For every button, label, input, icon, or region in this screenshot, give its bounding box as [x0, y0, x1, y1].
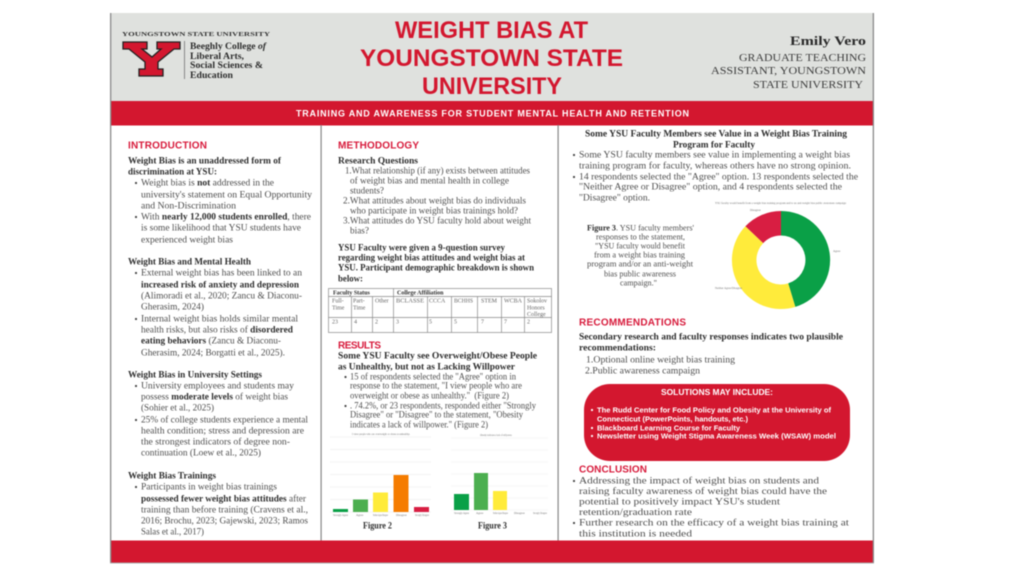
table: participant demographics: Full- — [332, 298, 344, 304]
text block: weight bias and mental health: Gherasim, 2024; Borgatti et al., 2025). — [141, 348, 285, 358]
callout: solutions may include: Newsletter using Weight Stigma Awareness Week (WSAW) model — [597, 434, 836, 440]
subtitle banner: TRAINING AND AWARENESS FOR STUDENT MENTAL HEALTH AND RETENTION — [296, 108, 689, 118]
title — [360, 17, 623, 100]
text block: weight bias in university settings: University employees and students may — [141, 380, 294, 392]
table: participant demographics: Honors — [527, 306, 545, 312]
logo: Youngstown State University — [122, 32, 271, 81]
bar chart: figure 2: Agree — [356, 513, 364, 517]
text block: research questions: 2.What attitudes about weight bias do individuals — [343, 196, 526, 206]
bar chart: figure 2 — [330, 432, 431, 530]
text block: weight bias trainings: possessed fewer weight bias attitudes after — [141, 494, 307, 504]
author block: ASSISTANT, YOUNGSTOWN — [711, 66, 866, 77]
table: participant demographics: BCLASSE — [396, 298, 424, 304]
heading: faculty value — [585, 128, 847, 150]
table: participant demographics: 5 — [429, 320, 432, 326]
logo: Youngstown State University: Social Sciences & — [190, 61, 263, 71]
header band — [110, 13, 874, 101]
text block: research questions: students? — [350, 186, 384, 196]
callout: solutions may include: The Rudd Center for Food Policy and Obesity at the University of — [597, 408, 832, 414]
table: participant demographics: 5 — [454, 320, 457, 326]
text block: conclusion: Addressing the impact of weight bias on students and — [579, 476, 819, 486]
text block: research questions: bias? — [350, 226, 369, 236]
donut chart: figure 3 responses — [715, 201, 846, 309]
text block: survey description — [338, 242, 535, 284]
heading: methodology: METHODOLOGY — [338, 140, 419, 152]
bar chart: figure 3: Disagree — [514, 511, 525, 515]
text block: weight bias trainings — [128, 470, 308, 538]
table: participant demographics: 3 — [396, 320, 399, 326]
bar chart: figure 2: Disagree — [396, 513, 407, 517]
text block: results: indicates a lack of willpower." (Figure 2) — [350, 420, 488, 430]
text block: faculty value bullets: training program for faculty, whereas others have no strong opinion. — [579, 160, 851, 172]
text block: weight bias trainings: Weight Bias Trainings — [128, 470, 216, 482]
text block: recommendations: 1.Optional online weight bias training — [586, 354, 735, 366]
text block: weight bias in university settings — [128, 370, 308, 458]
table: participant demographics: 7 — [504, 320, 507, 326]
author block: STATE UNIVERSITY — [753, 80, 863, 91]
text block: conclusion: Further research on the efficacy of a weight bias training at — [579, 518, 849, 528]
panel: methodology and results column — [328, 140, 552, 530]
text block: weight bias in university settings: (Sohier et al., 2025) — [141, 402, 214, 414]
table: participant demographics: Faculty Status — [333, 290, 370, 296]
table: participant demographics: College Affiliation — [397, 290, 444, 296]
logo: Youngstown State University: YOUNGSTOWN STATE UNIVERSITY — [122, 32, 271, 38]
heading: introduction: INTRODUCTION — [128, 140, 207, 152]
text block: research questions: of weight bias and mental health in college — [350, 176, 509, 186]
text block: weight bias at YSU: and Non-Discrimination — [141, 200, 236, 212]
text block: weight bias at YSU: experienced weight bias — [141, 234, 233, 246]
text block: weight bias and mental health: Weight Bias and Mental Health — [128, 256, 252, 268]
table: participant demographics: CCCA — [429, 298, 446, 304]
table: participant demographics: BCHHS — [454, 298, 473, 304]
text block: weight bias and mental health: Gherasim, 2024) — [141, 302, 204, 312]
table: participant demographics: 4 — [354, 320, 357, 326]
callout: solutions may include: Blackboard Learning Course for Faculty — [597, 426, 740, 432]
heading: results: RESULTS — [338, 340, 381, 352]
panel: faculty value and recommendations column — [573, 128, 858, 540]
title: UNIVERSITY — [422, 73, 562, 100]
caption: figure 3: Figure 3 — [478, 520, 507, 530]
text block: weight bias in university settings: possess moderate levels of weight bias — [141, 392, 288, 402]
panel: introduction column — [128, 140, 312, 538]
text block: faculty value bullets — [573, 150, 858, 204]
table: participant demographics: 23 — [332, 320, 338, 326]
bar chart: figure 3: Neither Agree/Disagree — [493, 511, 508, 515]
text block: weight bias in university settings: the strongest indicators of degree non- — [141, 436, 290, 448]
heading: conclusion: CONCLUSION — [579, 464, 647, 476]
text block: weight bias at YSU — [128, 156, 312, 246]
bar chart: figure 3: Obesity indicates a lack of willpower. — [480, 433, 512, 437]
table: participant demographics: 7 — [481, 320, 484, 326]
text block: conclusion — [573, 476, 849, 540]
text block: weight bias and mental health — [128, 256, 302, 358]
text block: figure 3 caption: from a weight bias training — [594, 250, 686, 260]
bar chart: figure 2: I view people who are overweight or obese as unhealthy. — [352, 432, 410, 436]
bar chart: figure 2: Neither Agree/Disagree — [373, 513, 388, 517]
table: participant demographics — [328, 288, 552, 332]
text block: figure 3 caption: bias public awareness — [604, 268, 677, 278]
bar chart: figure 3: Strongly Agree — [454, 511, 470, 515]
text block: weight bias trainings: Participants in weight bias trainings — [141, 482, 277, 492]
text block: weight bias and mental health: increased risk of anxiety and depression — [141, 280, 300, 290]
donut chart: figure 3 responses: Agree — [833, 249, 841, 253]
bar chart: figure 3: Strongly Disagree — [533, 511, 547, 515]
text block: weight bias at YSU: discrimination at YSU: — [128, 166, 217, 178]
author block: GRADUATE TEACHING — [739, 53, 866, 64]
text block: weight bias and mental health: External weight bias has been linked to an — [141, 268, 302, 278]
text block: figure 3 caption: responses to the statement, — [596, 232, 685, 242]
table: participant demographics: Time — [353, 306, 366, 312]
heading: faculty value: Some YSU Faculty Members see Value in a Weight Bias Training — [585, 128, 847, 140]
text block: weight bias in university settings: health condition; stress and depression are — [141, 426, 304, 436]
text block: research questions: who participate in weight bias trainings hold? — [350, 206, 518, 216]
table: participant demographics: College — [527, 312, 546, 318]
text block: weight bias and mental health: (Alimoradi et al., 2020; Zancu & Diaconu- — [141, 290, 302, 302]
author block: Emily Vero — [790, 34, 866, 48]
text block: weight bias and mental health: health risks, but also risks of disordered — [141, 324, 294, 336]
heading: faculty value: Program for Faculty — [673, 140, 755, 150]
text block: weight bias and mental health: eating behaviors (Zancu & Diaconu- — [141, 336, 281, 346]
donut chart: figure 3 responses: YSU faculty would benefit from a weight bias training program and/or an anti-weight bias public awareness campaign — [715, 201, 846, 205]
bar chart: figure 2: Strongly Agree — [333, 513, 349, 517]
text block: results: as Unhealthy, but not as Lacking Willpower — [338, 362, 516, 372]
text block: results: response to the statement, "I view people who are — [350, 380, 522, 392]
table: participant demographics: Sokolov — [527, 298, 547, 304]
text block: figure 3 caption: program and/or an anti-weight — [587, 258, 694, 268]
text block: conclusion: potential to positively impact YSU's student — [579, 496, 780, 508]
logo: Youngstown State University: Education — [190, 71, 234, 81]
text block: recommendations: recommendations: — [579, 342, 656, 354]
text block: weight bias at YSU: university's statement on Equal Opportunity — [141, 190, 312, 200]
footer band — [110, 540, 874, 562]
text block: recommendations — [579, 332, 844, 376]
text block: conclusion: raising faculty awareness of weight bias could have the — [579, 486, 827, 497]
logo: Youngstown State University: Liberal Arts, — [190, 52, 245, 62]
text block: weight bias in university settings: 25% of college students experience a mental — [141, 414, 308, 426]
text block: faculty value bullets: 14 respondents selected the "Agree" option. 13 respondents selected the — [579, 172, 858, 182]
table: participant demographics: 2 — [527, 320, 530, 326]
title: WEIGHT BIAS AT — [395, 17, 588, 44]
text block: results: Some YSU Faculty see Overweight/Obese People — [338, 350, 538, 362]
text block: conclusion: this institution is needed — [579, 528, 692, 540]
donut chart: figure 3 responses: Disagree — [750, 208, 761, 212]
text block: weight bias in university settings: continuation (Loew et al., 2025) — [141, 448, 261, 458]
callout: solutions may include: SOLUTIONS MAY INCLUDE: — [661, 387, 773, 397]
text block: weight bias at YSU: Weight bias is not addressed in the — [141, 178, 274, 188]
text block: results: 15 of respondents selected the "Agree" option in — [350, 372, 516, 382]
table: participant demographics: Part- — [353, 298, 365, 304]
text block: survey description: YSU. Participant demographic breakdown is shown — [338, 262, 535, 274]
text block: results: . 74.2%, or 23 respondents, responded either "Strongly — [350, 400, 536, 412]
text block: weight bias trainings: training than before training (Cravens et al., — [141, 504, 308, 516]
text block: weight bias in university settings: Weight Bias in University Settings — [128, 370, 262, 380]
bar chart: figure 2: Strongly Disagree — [415, 513, 429, 517]
table: participant demographics: 2 — [375, 320, 378, 326]
bar chart: figure 3 — [451, 433, 548, 530]
text block: weight bias trainings: 2016; Brochu, 2023; Gajewski, 2023; Ramos — [141, 516, 308, 526]
text block: weight bias at YSU: Weight Bias is an unaddressed form of — [128, 156, 282, 166]
logo: Youngstown State University: Beeghly College of — [190, 42, 267, 52]
text block: recommendations: 2.Public awareness campaign — [585, 366, 700, 376]
author block — [711, 34, 866, 91]
text block: survey description: below: — [338, 274, 363, 284]
text block: survey description: YSU Faculty were given a 9-question survey — [338, 242, 505, 254]
text block: research questions: Research Questions — [338, 156, 418, 166]
text block: weight bias trainings: Salas et al., 2017) — [141, 526, 204, 538]
text block: weight bias at YSU: With nearly 12,000 students enrolled, there — [141, 212, 311, 222]
text block: results: Disagree" or "Disagree" to the statement, "Obesity — [350, 410, 523, 420]
table: participant demographics: STEM — [481, 298, 498, 304]
text block: figure 3 caption: campaign." — [620, 278, 657, 288]
text block: research questions: 3.What attitudes do YSU faculty hold about weight — [343, 216, 531, 226]
text block: conclusion: retention/graduation rate — [579, 507, 692, 518]
text block: figure 3 caption — [587, 222, 694, 288]
text block: research questions: 1.What relationship (if any) exists between attitudes — [345, 166, 530, 176]
table: participant demographics: Time — [332, 306, 345, 312]
text block: faculty value bullets: "Neither Agree or Disagree" option, and 4 respondents selected the — [579, 182, 842, 192]
text block: figure 3 caption: "YSU faculty would benefit — [595, 240, 685, 250]
table: participant demographics: Other — [375, 298, 389, 304]
title: YOUNGSTOWN STATE — [360, 45, 623, 72]
bar chart: figure 3: Agree — [476, 511, 484, 515]
text block: research questions — [338, 156, 531, 236]
text block: faculty value bullets: Some YSU faculty members see value in implementing a weight bias — [579, 150, 850, 160]
text block: results — [338, 350, 538, 430]
text block: figure 3 caption: Figure 3. YSU faculty members' — [587, 222, 694, 232]
text block: weight bias at YSU: is some likelihood that YSU students have — [141, 222, 301, 234]
heading: recommendations: RECOMMENDATIONS — [579, 318, 686, 328]
table: participant demographics: WCBA — [504, 298, 523, 304]
text block: weight bias and mental health: Internal weight bias holds similar mental — [141, 314, 298, 324]
subtitle banner — [110, 101, 874, 126]
caption: figure 2: Figure 2 — [363, 520, 392, 530]
text block: faculty value bullets: "Disagree" option. — [579, 192, 650, 204]
donut chart: figure 3 responses: Neither Agree/Disagree — [715, 286, 743, 290]
text block: results: overweight or obese as unhealthy." (Figure 2) — [350, 390, 509, 402]
callout: solutions may include — [584, 384, 850, 461]
text block: survey description: regarding weight bias attitudes and weight bias at — [338, 252, 526, 264]
text block: recommendations: Secondary research and faculty responses indicates two plausible — [579, 332, 844, 342]
callout: solutions may include: Connecticut (PowerPoints, handouts, etc.) — [597, 416, 748, 424]
